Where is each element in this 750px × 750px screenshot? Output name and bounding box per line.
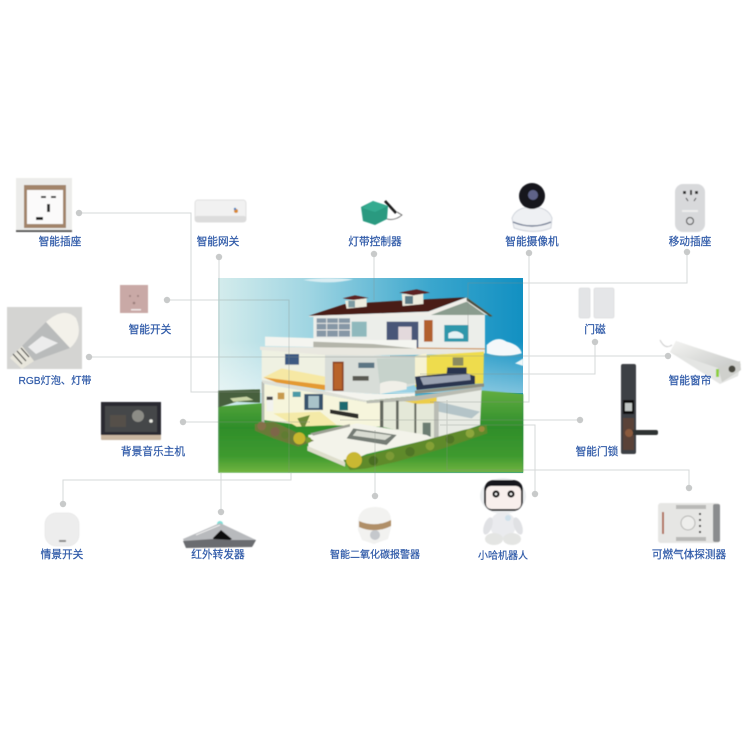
photo: cutaway house on lawn bbox=[218, 278, 523, 473]
label: 可燃气体探测器: 可燃气体探测器 bbox=[652, 548, 726, 561]
icon: LED strip controller bbox=[361, 201, 402, 225]
connector dots bbox=[60, 210, 692, 515]
icon: xiaoha robot bbox=[480, 478, 526, 545]
icon: smart door lock bbox=[621, 364, 658, 454]
icon: carbon dioxide alarm bbox=[358, 507, 391, 544]
icon: smart curtain motor bbox=[660, 340, 741, 384]
icon: RGB bulb bbox=[7, 307, 82, 369]
house illustration bbox=[218, 278, 523, 473]
right flower bed bbox=[343, 425, 487, 470]
label: 移动插座: 移动插座 bbox=[669, 235, 712, 248]
left flower bed bbox=[255, 422, 314, 447]
icon: smart switch panel bbox=[120, 285, 148, 313]
icon: mobile socket bbox=[675, 184, 705, 232]
label: 门磁: 门磁 bbox=[584, 323, 606, 336]
label: 智能摄像机: 智能摄像机 bbox=[505, 235, 559, 248]
label: 智能开关: 智能开关 bbox=[129, 323, 172, 336]
label: 情景开关: 情景开关 bbox=[41, 548, 84, 561]
label: 红外转发器: 红外转发器 bbox=[191, 548, 245, 561]
label: 智能插座: 智能插座 bbox=[39, 235, 82, 248]
label: 智能门锁: 智能门锁 bbox=[576, 445, 619, 458]
icon: infrared transmitter bbox=[183, 521, 256, 548]
label: 小哈机器人: 小哈机器人 bbox=[478, 549, 528, 562]
label: 智能窗帘: 智能窗帘 bbox=[669, 374, 711, 387]
icon: smart gateway bbox=[195, 200, 246, 222]
icon: combustible gas detector bbox=[658, 503, 720, 543]
label: 灯带控制器: 灯带控制器 bbox=[348, 235, 402, 248]
icon: scene switch bbox=[45, 513, 79, 546]
label: 背景音乐主机: 背景音乐主机 bbox=[121, 445, 185, 458]
icon: background music host bbox=[101, 402, 161, 440]
label: 智能网关: 智能网关 bbox=[197, 235, 240, 248]
icon: smart socket bbox=[16, 178, 72, 232]
connector lines bbox=[63, 213, 689, 512]
icon: door magnet sensor bbox=[579, 288, 614, 318]
label: 智能二氧化碳报警器: 智能二氧化碳报警器 bbox=[330, 548, 420, 561]
faint lines across photo bbox=[218, 278, 523, 473]
icon: smart camera bbox=[512, 183, 552, 232]
label: RGB灯泡、灯带: RGB灯泡、灯带 bbox=[18, 374, 92, 387]
